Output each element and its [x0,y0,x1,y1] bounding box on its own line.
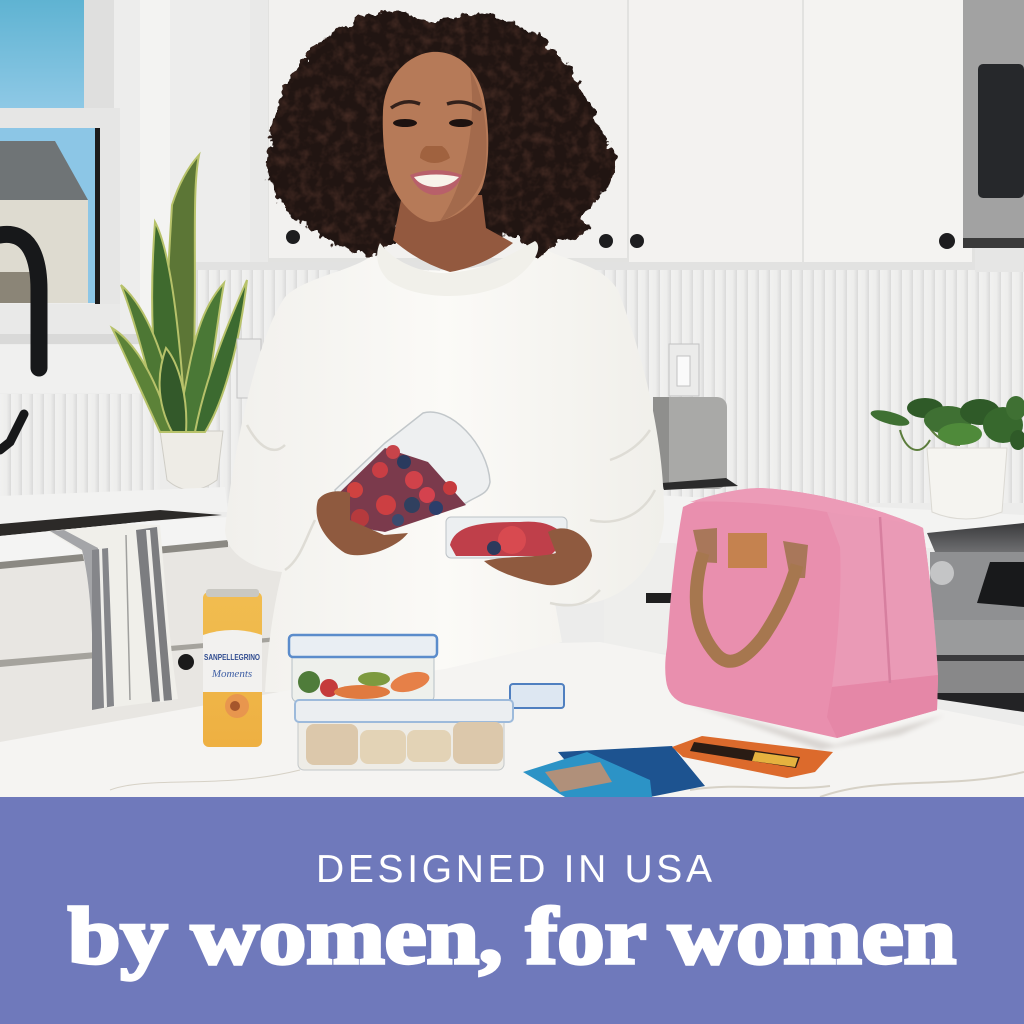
face [383,52,488,222]
potted herb plant [869,396,1024,519]
woman [225,11,664,692]
small container [292,640,434,702]
sparkling water can: SANPELLEGRINO [204,653,260,662]
hands and cups [317,412,592,585]
headline: by women, for women [68,893,956,981]
side panel [827,512,938,687]
protein bar [672,736,833,778]
snack packets [523,746,705,797]
berries in cup [337,445,466,532]
toaster [653,397,738,490]
hand holding container [484,528,592,585]
wall outlets [237,339,699,398]
sparkling water can: Moments [211,668,252,680]
open lid [510,684,564,708]
tall clear cup [335,412,490,532]
island counter top [0,642,1024,797]
bag shadow [680,700,945,750]
sparkling water can [203,589,262,747]
faucet [0,234,39,450]
window [0,0,148,394]
eyebrow text: DESIGNED IN USA [316,848,712,891]
handle [696,553,797,661]
left counter and sink [0,487,290,742]
neck [393,195,513,272]
zipper [880,517,890,683]
food containers [289,635,564,770]
hand holding cup [317,491,408,555]
ribbed backsplash [0,268,1024,503]
large container [298,716,504,770]
sweater folds [247,425,655,605]
bag body [665,488,938,738]
hair [267,11,617,258]
sweater [225,245,664,692]
pink lunch bag [665,488,945,750]
upper cabinets [140,0,1024,345]
snake plant and pot [112,155,247,490]
photo: woman packing lunch in a kitchen [0,0,1024,797]
banner [0,797,1024,1024]
stove [927,523,1024,712]
kitchen wall [0,0,1024,797]
right counter [604,495,1024,653]
top panel [690,488,923,528]
facial features [391,102,481,195]
striped towel [48,524,178,710]
straps [693,528,808,578]
brand label [728,533,767,568]
microwave [963,0,1024,248]
sweater collar [377,241,538,296]
bag base [827,675,938,738]
marble veins [110,770,1024,797]
small clear container [446,517,567,558]
